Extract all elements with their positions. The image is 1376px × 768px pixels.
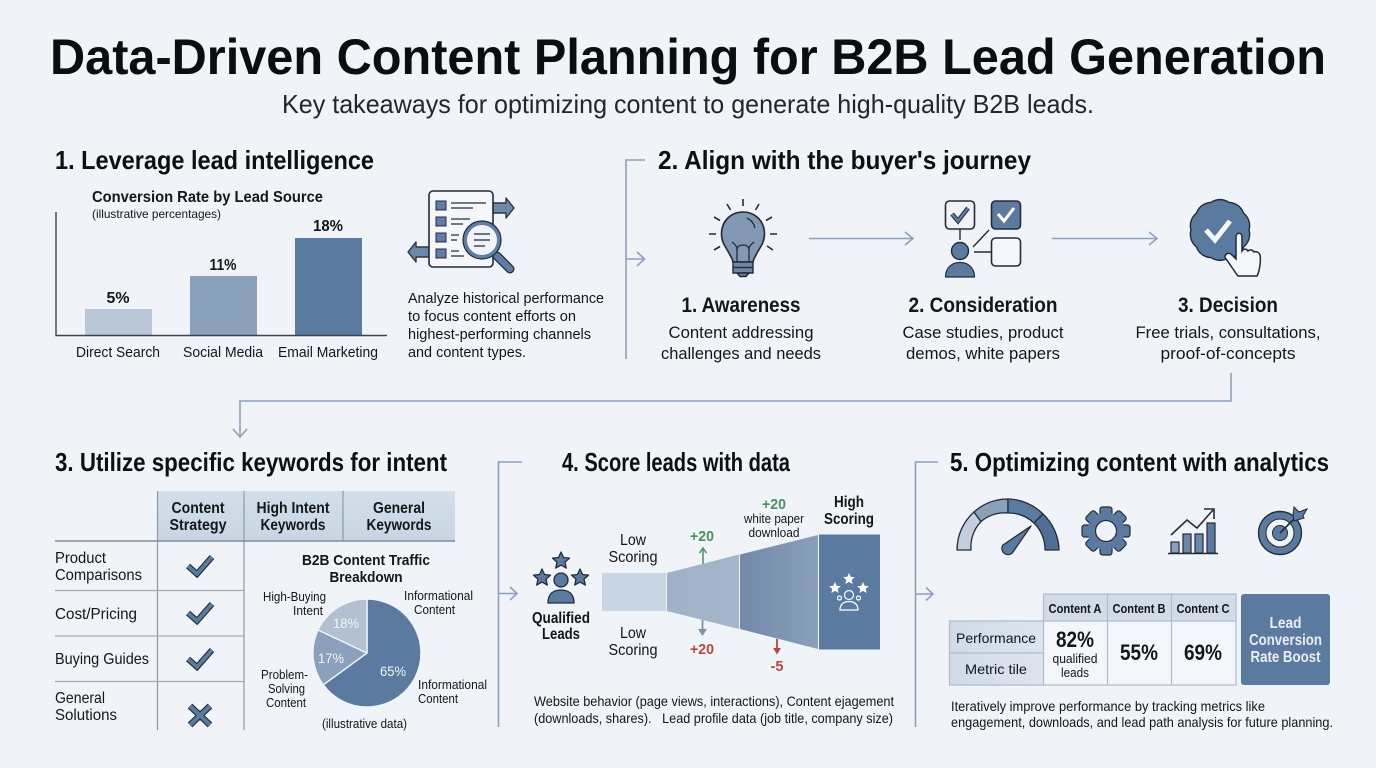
icon: high scoring leads xyxy=(829,573,869,610)
row labels xyxy=(956,630,1036,677)
panel: 4 score leads xyxy=(498,447,894,727)
icon: consideration checklist xyxy=(946,201,1020,277)
column headers: Strategy xyxy=(170,517,227,534)
bar: email marketing: 18% xyxy=(313,218,343,235)
callout: lead conversion rate boost: Conversion xyxy=(1249,632,1322,649)
label: qualified leads xyxy=(532,610,590,643)
row labels: General xyxy=(55,690,105,707)
text: iterative improvement: engagement, downloads, and lead path analysis for future planning. xyxy=(951,714,1333,730)
heading: section 4: 4. Score leads with data xyxy=(562,447,790,477)
stage: consideration: Case studies, product xyxy=(902,323,1064,342)
row labels: Product xyxy=(55,550,107,567)
stage: awareness: 1. Awareness xyxy=(682,294,800,317)
heading: section 1: 1. Leverage lead intelligence xyxy=(55,145,374,175)
bar: social media: 11% xyxy=(210,257,236,274)
stage: decision xyxy=(1136,294,1320,363)
score up +20 xyxy=(690,528,714,564)
score white paper +20 xyxy=(743,496,804,540)
bar: direct search xyxy=(76,290,160,361)
panel: 5 analytics xyxy=(916,447,1333,730)
chart subtitle: (illustrative percentages) xyxy=(92,207,221,221)
text: analyze performance xyxy=(408,291,604,361)
label: high scoring: High xyxy=(834,494,864,511)
score white paper +20: white paper xyxy=(743,512,804,526)
score white paper +20: +20 xyxy=(762,496,786,513)
stage: awareness: Content addressing xyxy=(668,323,814,342)
pie labels: Solving xyxy=(268,682,305,696)
row labels: Solutions xyxy=(55,707,117,724)
callout: lead conversion rate boost: Lead xyxy=(1270,615,1302,632)
text: iterative improvement xyxy=(951,698,1333,730)
stage: awareness: challenges and needs xyxy=(661,344,821,363)
icon: gear xyxy=(1082,507,1130,555)
score down +20: +20 xyxy=(690,641,714,658)
bar: direct search: Direct Search xyxy=(76,345,160,361)
pie labels: Informational xyxy=(404,589,473,603)
row labels: Metric tile xyxy=(965,661,1027,677)
row labels: Buying Guides xyxy=(55,651,149,668)
bracket with arrow: section 4 xyxy=(498,462,522,727)
column headers xyxy=(170,500,432,534)
column headers: Content xyxy=(172,500,225,517)
column headers: Content B xyxy=(1112,601,1166,616)
title: Data-Driven Content Planning for B2B Lead Generation xyxy=(50,29,1326,85)
funnel chart xyxy=(602,534,880,650)
stage: consideration xyxy=(902,294,1064,363)
arrow: awareness to consideration xyxy=(809,232,913,245)
pie labels: High-Buying xyxy=(263,590,326,604)
bar: direct search: 5% xyxy=(106,290,130,307)
score up +20: +20 xyxy=(690,528,714,545)
pie slices xyxy=(313,599,421,707)
panel: 3 keywords for intent xyxy=(55,447,487,731)
score down +20 xyxy=(690,620,714,658)
bar: social media xyxy=(183,257,264,361)
label: qualified leads: Leads xyxy=(542,626,580,643)
pie chart: traffic breakdown: Breakdown xyxy=(330,569,402,586)
chart axes xyxy=(56,212,387,336)
score down -5: -5 xyxy=(770,658,784,675)
table: keywords xyxy=(55,491,455,730)
pie values: 17% xyxy=(318,650,344,666)
pie labels: Content xyxy=(266,696,306,710)
column headers: Content C xyxy=(1176,601,1230,616)
row labels: Comparisons xyxy=(55,567,142,584)
chart title: Conversion Rate by Lead Source xyxy=(92,189,323,206)
pie labels: Content xyxy=(414,603,455,617)
bar chart: conversion rate by lead source xyxy=(56,189,387,361)
pie labels xyxy=(261,589,487,731)
pie values: 65% xyxy=(380,663,406,679)
stage: consideration: demos, white papers xyxy=(906,344,1060,363)
values xyxy=(1052,627,1222,680)
label: low scoring top: Low xyxy=(620,532,647,549)
label: high scoring xyxy=(824,494,874,528)
column headers: High Intent xyxy=(256,500,330,517)
arrow: consideration to decision xyxy=(1052,232,1157,245)
label: low scoring top: Scoring xyxy=(608,549,658,566)
values: 82% xyxy=(1056,627,1094,652)
pie labels: Content xyxy=(418,692,458,706)
pie labels: Informational xyxy=(418,678,487,692)
bar: social media: Social Media xyxy=(183,345,264,361)
bar: email marketing: Email Marketing xyxy=(278,345,378,361)
pie labels: Problem- xyxy=(261,668,308,682)
pie values: 18% xyxy=(333,615,359,631)
text: iterative improvement: Iteratively improve performance by tracking metrics like xyxy=(951,698,1265,714)
subtitle: Key takeaways for optimizing content to generate high-quality B2B leads. xyxy=(282,89,1094,119)
label: low scoring bottom: Scoring xyxy=(608,642,658,659)
row labels: Performance xyxy=(956,630,1036,646)
text: scoring data: (downloads, shares). Lead profile data (job title, company size) xyxy=(534,710,893,726)
icon: target xyxy=(1258,507,1307,554)
bracket with arrow: section 5 xyxy=(916,462,938,727)
text: scoring data: Website behavior (page views, interactions), Content ejagement xyxy=(534,693,894,709)
callout: lead conversion rate boost xyxy=(1241,594,1330,685)
values: leads xyxy=(1061,666,1089,680)
label: qualified leads: Qualified xyxy=(532,610,590,627)
icon: decision badge with pointer xyxy=(1190,200,1260,276)
column headers: Content A xyxy=(1048,601,1102,616)
panel: 2 buyer's journey xyxy=(626,145,1320,363)
table: content performance xyxy=(950,594,1236,685)
heading: section 3: 3. Utilize specific keywords for intent xyxy=(55,447,447,477)
stage: decision: Free trials, consultations, xyxy=(1136,323,1320,342)
row labels: Cost/Pricing xyxy=(55,606,137,623)
values: qualified xyxy=(1052,652,1098,666)
stage: decision: proof-of-concepts xyxy=(1160,344,1296,363)
text: analyze performance: highest-performing channels xyxy=(408,327,591,343)
bracket with arrow: section 2 xyxy=(626,160,645,359)
heading: section 2: 2. Align with the buyer's journey xyxy=(658,145,1031,175)
text: analyze performance: to focus content efforts on xyxy=(408,309,576,325)
pie labels: Intent xyxy=(293,604,323,618)
bar: email marketing xyxy=(278,218,378,361)
label: low scoring bottom: Low xyxy=(620,625,647,642)
icon: qualified leads xyxy=(534,552,588,603)
column headers: General xyxy=(373,500,425,517)
label: low scoring top xyxy=(608,532,658,566)
column headers xyxy=(1048,601,1230,616)
score down -5 xyxy=(770,639,784,675)
pie labels: (illustrative data) xyxy=(322,717,407,731)
label: high scoring: Scoring xyxy=(824,511,874,528)
callout: lead conversion rate boost: Rate Boost xyxy=(1250,649,1320,666)
column headers: Keywords xyxy=(260,517,326,534)
text: analyze performance: and content types. xyxy=(408,345,526,361)
icon: lightbulb xyxy=(709,199,777,276)
stage: awareness xyxy=(661,294,821,363)
values: 69% xyxy=(1184,640,1222,665)
pie title: B2B Content Traffic xyxy=(302,552,430,569)
text: scoring data xyxy=(534,693,894,726)
panel: 1 lead intelligence xyxy=(55,145,604,361)
icon: check marks and cross xyxy=(188,557,212,725)
arrow: connector to row 2 xyxy=(233,373,1231,437)
icon: gauge xyxy=(957,499,1059,555)
column headers: Keywords xyxy=(366,517,432,534)
pie chart: traffic breakdown xyxy=(261,552,487,731)
stage: decision: 3. Decision xyxy=(1178,294,1278,317)
values: 55% xyxy=(1120,640,1158,665)
icon: document analysis xyxy=(408,191,514,269)
row labels xyxy=(55,550,149,724)
icon: growth chart xyxy=(1168,509,1218,554)
stage: consideration: 2. Consideration xyxy=(908,294,1058,317)
score white paper +20: download xyxy=(748,526,800,540)
pie values xyxy=(318,615,406,679)
text: analyze performance: Analyze historical performance xyxy=(408,291,604,307)
label: low scoring bottom xyxy=(608,625,658,659)
